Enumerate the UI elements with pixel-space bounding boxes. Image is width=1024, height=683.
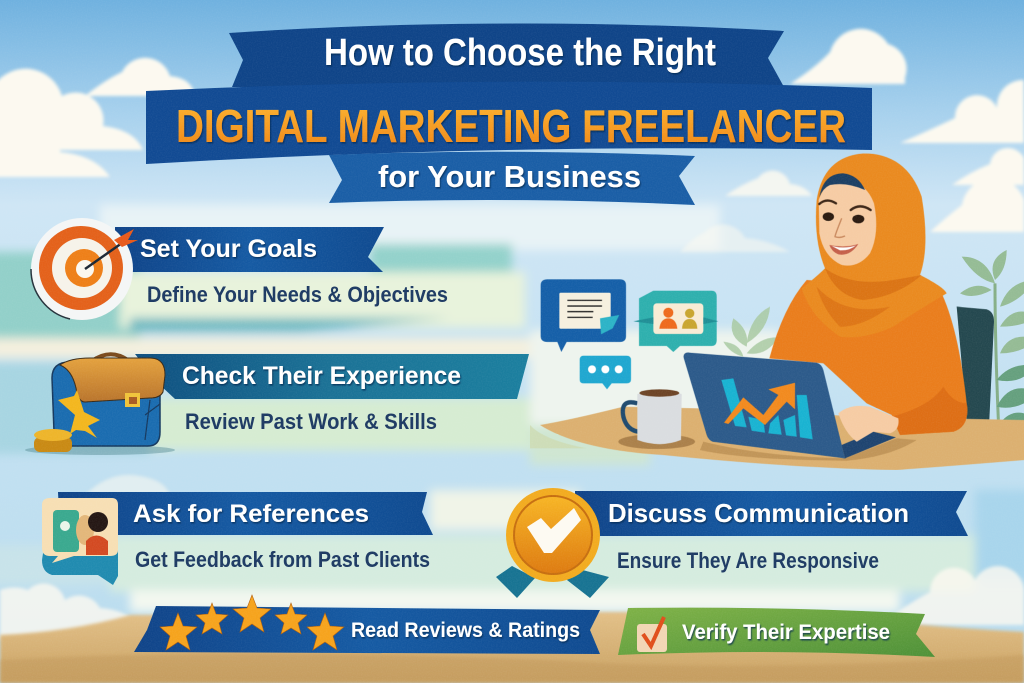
title line 1: How to Choose the Right xyxy=(324,32,716,74)
callout: verify their expertise xyxy=(618,608,935,657)
description: Define Your Needs & Objectives xyxy=(147,282,448,307)
icon: five stars xyxy=(160,595,344,650)
face xyxy=(819,180,876,266)
woman torso xyxy=(769,280,967,435)
title banner xyxy=(146,23,872,205)
plant behind laptop xyxy=(723,307,778,357)
mug xyxy=(618,434,695,449)
bubble: dots xyxy=(580,356,631,389)
laptop chart arrow xyxy=(724,383,795,425)
step: ask for references xyxy=(42,492,433,585)
bubble: document xyxy=(541,279,626,352)
centre ribbon xyxy=(146,82,872,164)
lower ribbon xyxy=(329,152,695,205)
icon: target xyxy=(31,218,138,320)
ribbon xyxy=(115,227,384,272)
label: Verify Their Expertise xyxy=(682,621,890,644)
ribbon xyxy=(134,606,600,654)
brows and eyes xyxy=(819,200,871,210)
ribbon xyxy=(575,491,968,536)
icon: medal xyxy=(496,488,609,598)
label: Read Reviews & Ratings xyxy=(351,619,580,642)
laptop screen xyxy=(683,352,845,458)
background paint bands xyxy=(0,205,1024,612)
nose and mouth xyxy=(835,218,845,237)
table xyxy=(540,407,1024,470)
laptop base xyxy=(842,432,896,458)
icon: speech bubbles xyxy=(42,498,118,585)
callout: read reviews and ratings xyxy=(134,595,600,654)
sandy ground xyxy=(0,612,1024,683)
icon: briefcase xyxy=(25,354,175,455)
description: Get Feedback from Past Clients xyxy=(135,547,430,572)
top ribbon xyxy=(229,23,784,87)
title line 3: for Your Business xyxy=(378,159,641,194)
ribbon xyxy=(618,608,935,657)
ribbon xyxy=(58,492,433,535)
heading: Set Your Goals xyxy=(140,235,317,263)
title line 2: DIGITAL MARKETING FREELANCER xyxy=(176,100,846,152)
description: Review Past Work & Skills xyxy=(185,409,437,434)
chair xyxy=(957,307,994,420)
step: discuss communication xyxy=(496,488,968,598)
step: check their experience xyxy=(25,354,529,455)
laptop chart bars xyxy=(721,378,813,439)
description: Ensure They Are Responsive xyxy=(617,548,879,573)
bubble: people xyxy=(639,291,717,352)
ribbon xyxy=(135,354,529,399)
plant right xyxy=(960,250,1024,423)
heading: Discuss Communication xyxy=(608,498,909,528)
illustration: freelancer at desk xyxy=(530,153,1024,470)
heading: Check Their Experience xyxy=(182,362,461,390)
hijab xyxy=(802,153,947,337)
step: set your goals xyxy=(31,218,448,320)
heading: Ask for References xyxy=(133,500,369,528)
icon: checkbox xyxy=(637,617,667,652)
hand xyxy=(838,406,899,442)
